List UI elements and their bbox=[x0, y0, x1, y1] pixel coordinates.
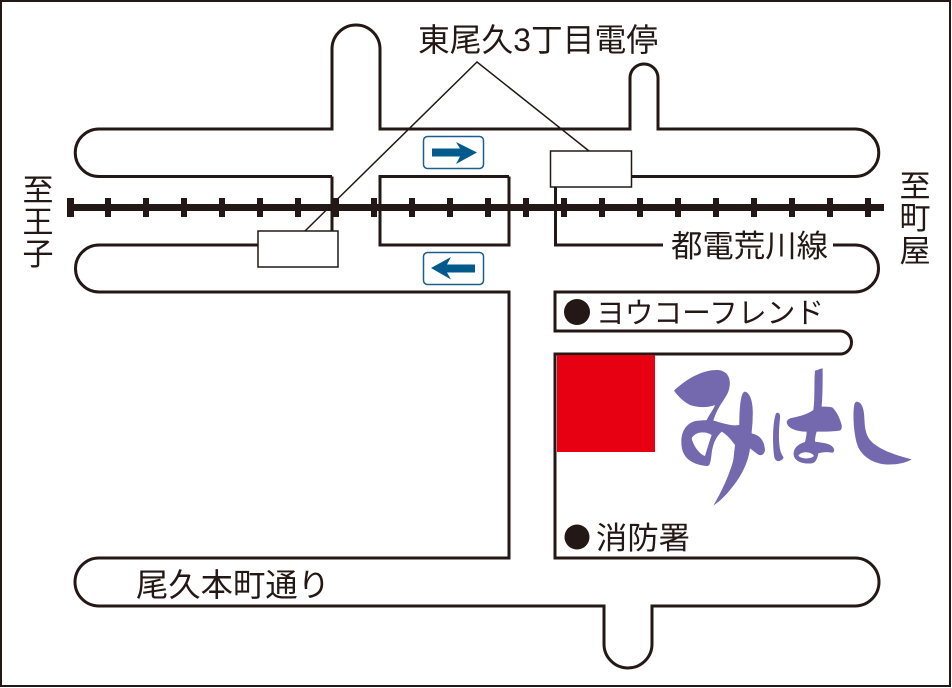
landmark: Youko Friend: ヨウコーフレンド bbox=[596, 298, 824, 330]
direction label: west bbox=[22, 173, 54, 272]
direction label: west: 王 bbox=[22, 205, 54, 240]
stop label: 東尾久3丁目電停 bbox=[418, 22, 658, 58]
arrow sign: eastbound bbox=[424, 136, 484, 168]
direction label: west: 子 bbox=[22, 237, 54, 272]
direction label: east: 町 bbox=[900, 201, 930, 236]
arrow sign: westbound bbox=[424, 252, 484, 284]
leader lines to tram stops bbox=[305, 62, 589, 231]
railway track bbox=[67, 198, 884, 217]
landmark: fire station: 消防署 bbox=[596, 521, 690, 556]
logo: mihashi bbox=[674, 368, 912, 506]
direction label: east bbox=[900, 169, 930, 269]
tram line label: 都電荒川線 bbox=[671, 229, 828, 264]
shop location bbox=[557, 355, 655, 452]
tram stop west bbox=[258, 231, 338, 267]
direction label: west: 至 bbox=[22, 173, 54, 208]
direction label: east: 至 bbox=[900, 169, 930, 204]
tram stop east bbox=[550, 151, 632, 187]
street label: 尾久本町通り bbox=[136, 567, 330, 603]
direction label: east: 屋 bbox=[900, 234, 930, 269]
roads bbox=[75, 25, 879, 668]
